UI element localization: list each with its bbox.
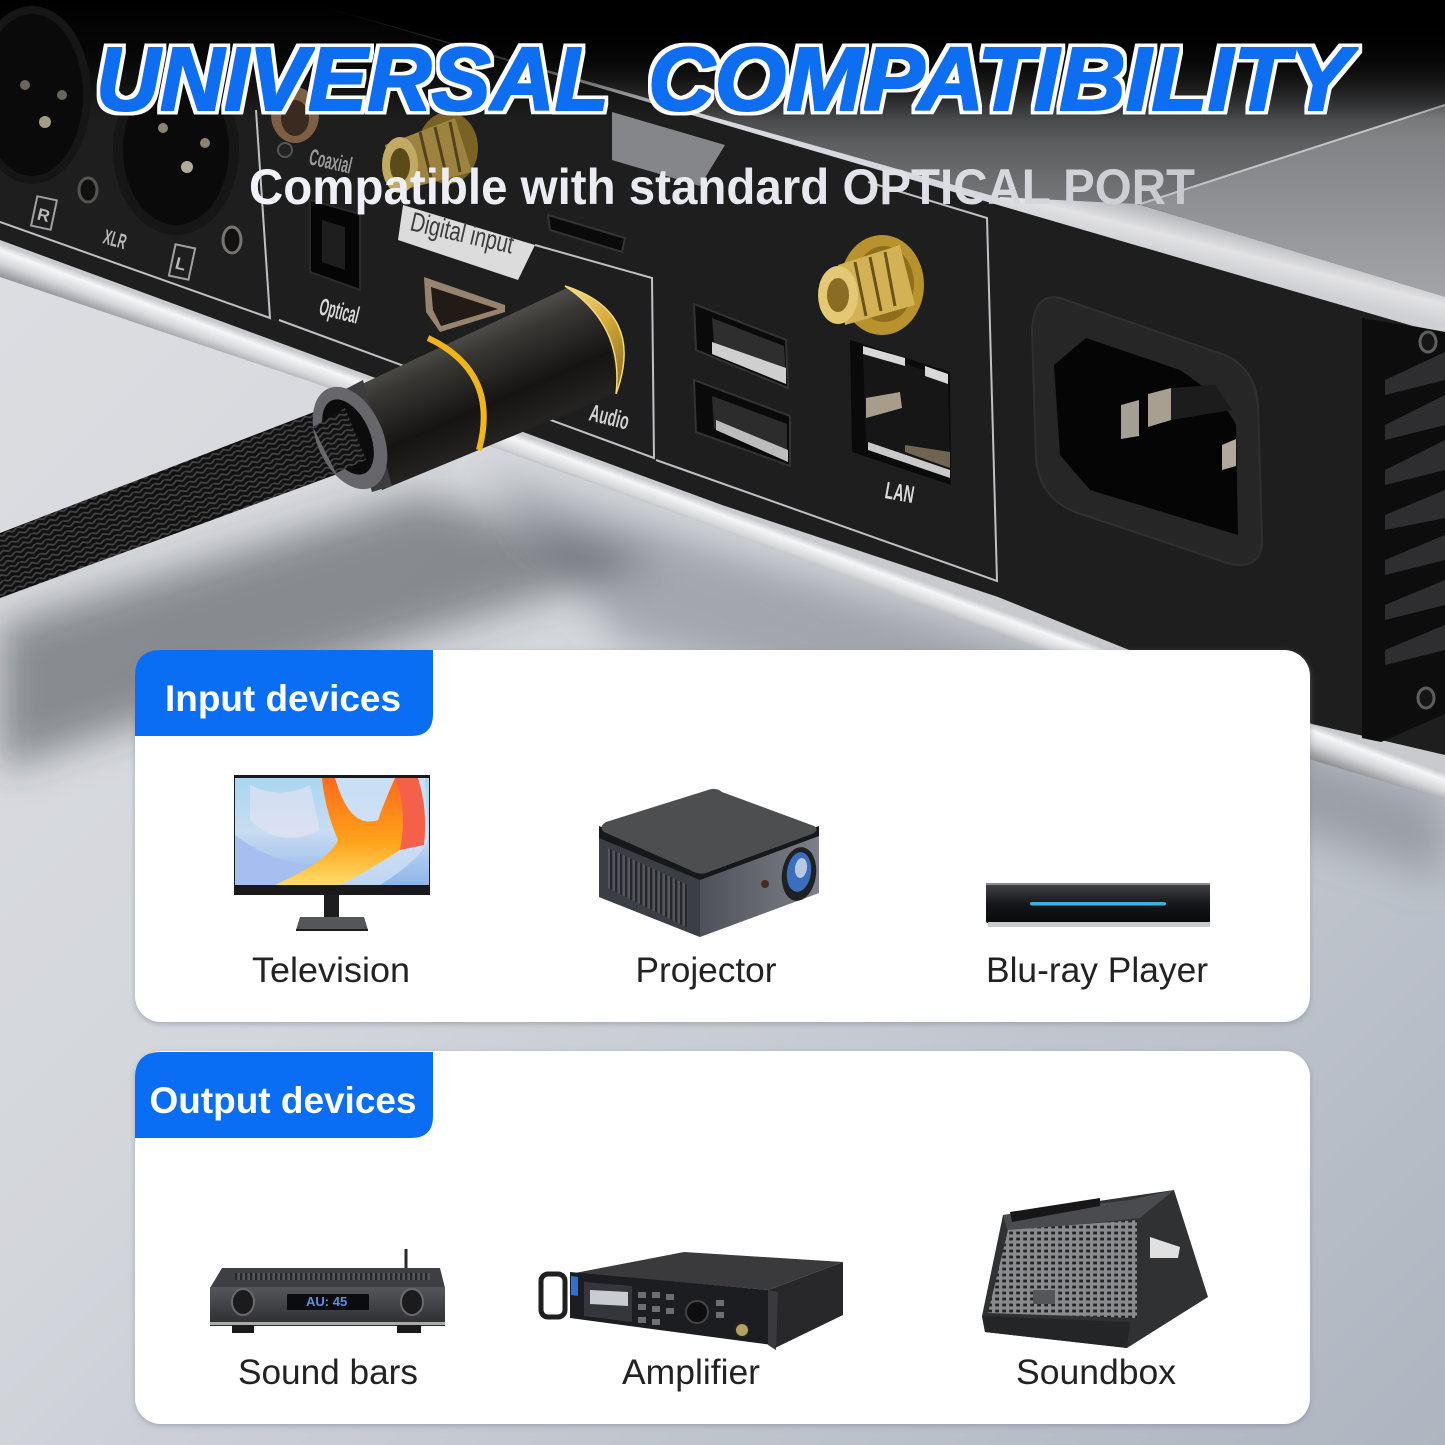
cable	[0, 402, 370, 598]
coaxial RCA port	[271, 87, 355, 179]
label: amplifier: Amplifier	[622, 1353, 760, 1392]
title: UNIVERSAL	[96, 30, 609, 130]
output devices tab: Output devices	[150, 1080, 416, 1121]
device: top surface	[300, 0, 1445, 300]
device: bottom silver strip	[0, 240, 1445, 800]
label: projector: Projector	[636, 951, 777, 990]
digital input sticker	[398, 205, 535, 280]
digital input sticker: Digital input	[408, 207, 517, 260]
panel: output devices	[135, 1051, 1310, 1424]
label: blu-ray player: Blu-ray Player	[986, 951, 1208, 990]
gold SMA connector left	[382, 112, 478, 193]
labels: R XLR L: R	[35, 205, 52, 226]
input devices tab: Input devices	[165, 678, 401, 719]
labels: R XLR L: XLR	[101, 226, 129, 254]
LAN port: LAN	[883, 477, 916, 509]
icon: projector	[599, 789, 820, 937]
micro slot	[548, 215, 625, 252]
HDMI port	[424, 277, 505, 332]
icon: sound bars receiver	[210, 1249, 445, 1333]
gold SMA connector right	[818, 235, 924, 335]
LAN port	[850, 340, 951, 509]
device: front face	[0, 0, 1445, 755]
input devices tab	[135, 650, 433, 736]
panel: input devices	[135, 650, 1310, 1022]
panel outlines on face	[0, 110, 997, 581]
icon: soundbox	[982, 1190, 1208, 1348]
icon: television	[234, 775, 430, 931]
optical port	[310, 200, 362, 329]
output devices tab	[135, 1052, 433, 1138]
XLR connectors	[0, 10, 241, 253]
device: top highlight line	[1140, 105, 1445, 300]
label: sound bars: Sound bars	[238, 1353, 418, 1392]
label: television: Television	[252, 951, 410, 990]
silver sticker	[612, 112, 725, 186]
title	[96, 30, 1358, 130]
shadow under device and cable	[0, 470, 1445, 880]
connector	[298, 286, 624, 501]
labels: R XLR L: L	[173, 254, 188, 275]
subtitle: Compatible with standard OPTICAL PORT	[249, 159, 1195, 215]
USB ports	[694, 304, 790, 466]
top darkening gradient	[0, 0, 1445, 120]
title: COMPATIBILITY	[648, 30, 1358, 130]
optical port: Optical	[317, 294, 362, 329]
icon: amplifier	[541, 1252, 843, 1350]
power inlet	[1032, 297, 1262, 565]
Audio label: Audio	[587, 400, 632, 435]
device: top silver edge	[998, 197, 1445, 332]
label: soundbox: Soundbox	[1016, 1353, 1177, 1392]
icon: blu-ray player	[986, 883, 1210, 927]
labels: R XLR L	[31, 196, 195, 280]
coaxial RCA port: Coaxial	[307, 144, 355, 179]
heat sink	[1362, 318, 1445, 742]
icon: sound bars receiver: AU: 45	[306, 1294, 347, 1309]
